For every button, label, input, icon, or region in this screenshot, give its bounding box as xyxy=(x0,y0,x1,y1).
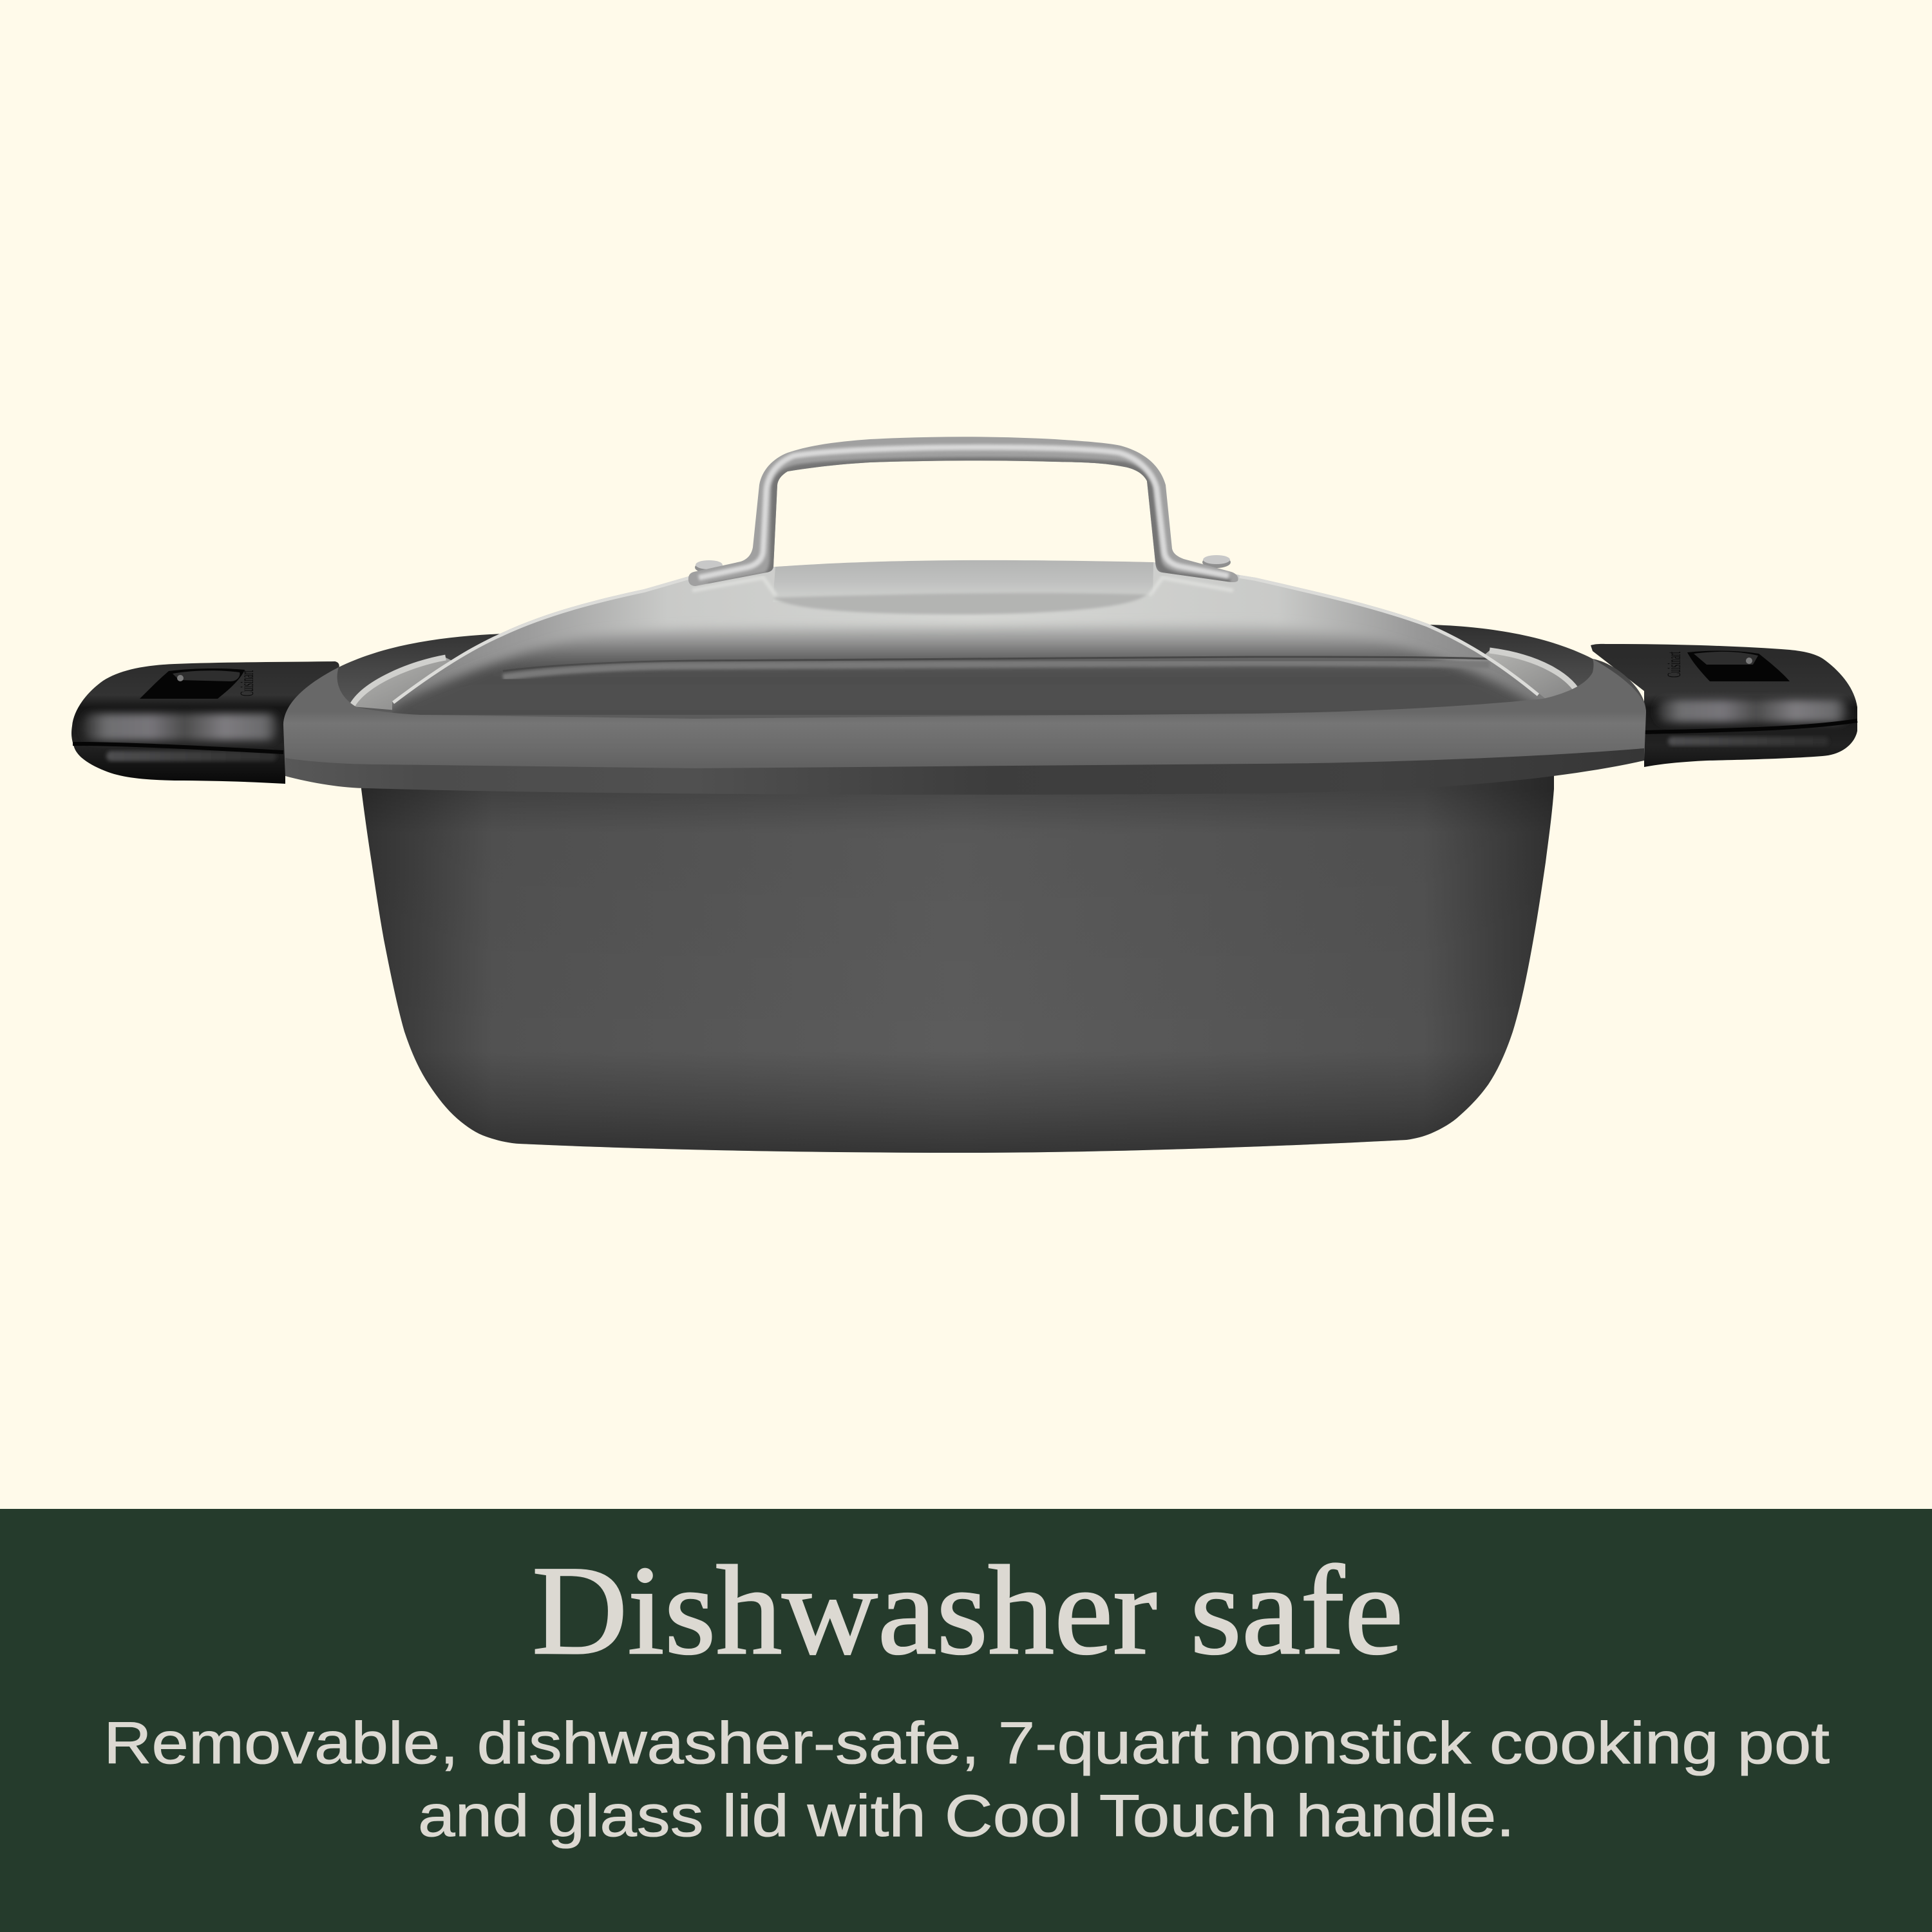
glass lid xyxy=(350,560,1578,715)
product: nonstick cooking pot with glass lid xyxy=(71,437,1857,1153)
cream background xyxy=(0,0,1932,1509)
icon: left cool touch pot handle: Cuisinart xyxy=(236,670,258,696)
pot body xyxy=(361,773,1554,1153)
lid skirt left xyxy=(352,658,470,712)
rivet left xyxy=(695,560,723,573)
icon: right cool touch pot handle xyxy=(1591,644,1857,767)
description line 2: and glass lid with Cool Touch handle. xyxy=(418,1783,1515,1849)
infographic canvas xyxy=(0,437,1932,1932)
heading: Dishwasher safe xyxy=(532,1540,1403,1681)
lid skirt right xyxy=(1475,650,1580,708)
icon: right cool touch pot handle: Cuisinart xyxy=(1663,652,1685,677)
lid glass dome xyxy=(392,560,1545,715)
pot rim lower band xyxy=(285,748,1644,795)
stainless lid handle xyxy=(688,437,1238,587)
icon: left cool touch pot handle xyxy=(71,661,339,784)
pot rim front face xyxy=(283,659,1646,776)
lid handle reflection right xyxy=(1150,578,1233,596)
description line 1: Removable, dishwasher-safe, 7-quart nonstick cooking pot xyxy=(104,1710,1830,1776)
rivet right xyxy=(1202,555,1231,568)
panel: green caption band xyxy=(0,1509,1932,1932)
pot rim back edge xyxy=(283,625,1646,726)
lid handle reflection left xyxy=(692,578,776,596)
